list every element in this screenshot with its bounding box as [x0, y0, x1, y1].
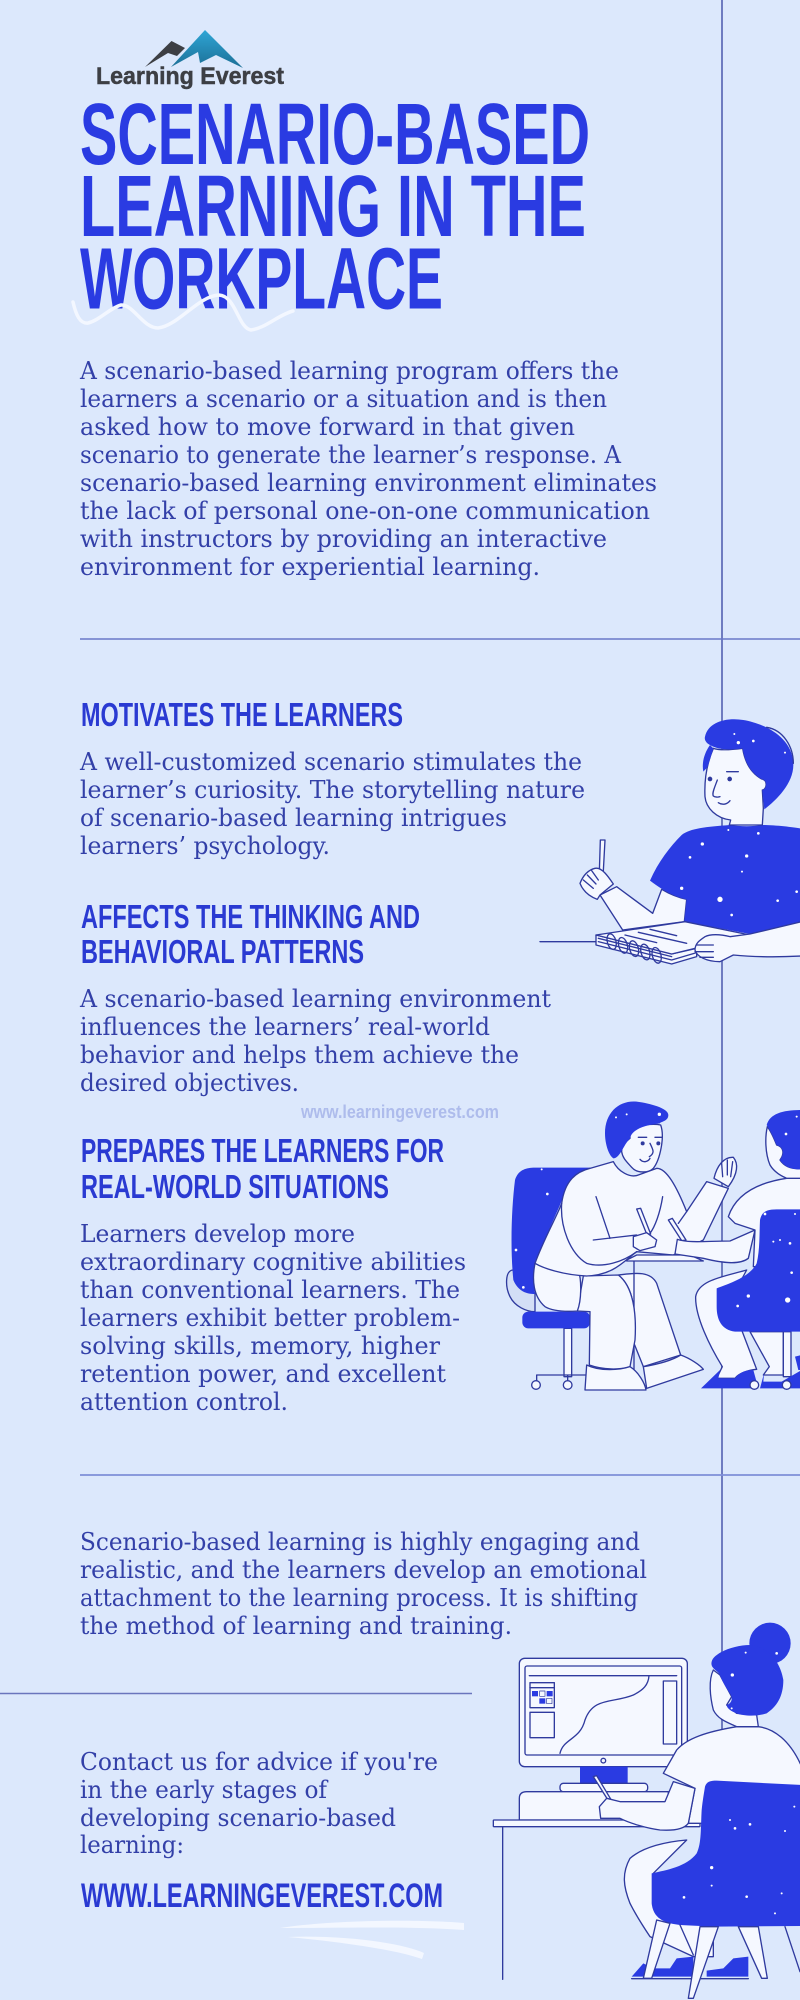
man hand and pencil — [633, 1208, 657, 1251]
raised hand — [714, 1157, 737, 1187]
intro paragraph: A scenario-based learning program offers the — [79, 357, 619, 385]
title — [80, 86, 590, 328]
second person pencil — [668, 1218, 686, 1241]
illustration: man with notebook — [540, 719, 800, 964]
table leg — [632, 1262, 636, 1390]
contact call to action: learning: — [80, 1831, 184, 1859]
table top — [627, 1255, 703, 1261]
table line — [540, 940, 597, 944]
intro paragraph: with instructors by providing an interactive — [80, 525, 607, 553]
body text: of scenario-based learning intrigues — [80, 804, 507, 832]
heading: REAL-WORLD SITUATIONS — [81, 1168, 389, 1205]
closing paragraph — [80, 1528, 647, 1640]
monitor stand — [560, 1767, 648, 1792]
notebook — [596, 922, 750, 964]
closing paragraph: realistic, and the learners develop an emotional — [80, 1556, 647, 1584]
section: prepares the learners — [80, 1132, 466, 1416]
monitor — [519, 1658, 687, 1767]
body text: learner’s curiosity. The storytelling nature — [80, 776, 585, 804]
website url: WWW.LEARNINGEVEREST.COM — [81, 1877, 443, 1915]
illustration: two people talking at a table — [507, 1102, 800, 1390]
second person arm — [675, 1230, 755, 1263]
body text: behavior and helps them achieve the — [80, 1041, 519, 1069]
second person head — [766, 1110, 800, 1178]
white squiggle under title — [73, 295, 293, 330]
hair — [703, 719, 793, 809]
section: affects the thinking and behavioral patterns — [79, 898, 551, 1097]
intro paragraph: environment for experiential learning. — [80, 553, 540, 581]
body text — [80, 1220, 466, 1416]
body text — [79, 748, 585, 860]
desk leg — [501, 1827, 505, 1979]
hand and pencil — [580, 840, 613, 899]
body text: Learners develop more — [80, 1220, 355, 1248]
chair — [652, 1781, 800, 1927]
desk surface — [493, 1820, 700, 1827]
man front shoe — [585, 1365, 646, 1390]
chair back — [512, 1168, 592, 1294]
body text: extraordinary cognitive abilities — [80, 1248, 466, 1276]
man front leg — [577, 1275, 635, 1369]
shoes — [632, 1957, 748, 1979]
head — [710, 1623, 791, 1727]
torso — [663, 1727, 800, 1823]
body text: solving skills, memory, higher — [80, 1332, 441, 1360]
speckles — [683, 1652, 795, 1914]
logo wordmark: Learning Everest — [96, 63, 284, 90]
right hand and arm — [695, 922, 800, 962]
contact call to action: Contact us for advice if you're — [80, 1748, 438, 1776]
contact call to action: developing scenario-based — [80, 1804, 396, 1832]
shirt speckles — [680, 733, 798, 916]
arm with pencil — [600, 887, 687, 930]
heading: AFFECTS THE THINKING AND — [81, 898, 420, 935]
body text: A scenario-based learning environment — [79, 985, 551, 1013]
icon: dark mountain — [145, 41, 185, 67]
body text: desired objectives. — [80, 1069, 299, 1097]
body text: than conventional learners. The — [80, 1276, 460, 1304]
intro paragraph — [79, 357, 657, 581]
speckles — [515, 1113, 798, 1307]
contact call to action — [80, 1748, 438, 1859]
face — [705, 748, 766, 825]
man torso — [535, 1162, 728, 1276]
intro paragraph: the lack of personal one-on-one communication — [80, 497, 650, 525]
face details — [708, 772, 738, 804]
body text: learners exhibit better problem- — [80, 1304, 460, 1332]
chair legs — [643, 1920, 800, 1998]
title: WORKPLACE — [80, 230, 443, 328]
body text: retention power, and excellent — [80, 1360, 446, 1388]
desktop box — [519, 1792, 668, 1820]
shirt — [650, 825, 800, 934]
logo: Learning Everest — [96, 30, 284, 90]
body text: learners’ psychology. — [80, 832, 330, 860]
heading: BEHAVIORAL PATTERNS — [81, 933, 364, 970]
body text — [79, 985, 551, 1097]
intro paragraph: asked how to move forward in that given — [80, 413, 575, 441]
heading — [81, 898, 420, 970]
contact call to action: in the early stages of — [80, 1776, 329, 1804]
woman thigh and leg — [624, 1840, 713, 1957]
closing paragraph: attachment to the learning process. It is shifting — [80, 1584, 638, 1612]
white brush strokes under url — [280, 1921, 464, 1959]
second person torso — [728, 1178, 800, 1267]
chair post and base — [532, 1328, 588, 1389]
watermark url: www.learningeverest.com — [300, 1102, 499, 1122]
second person chair — [717, 1209, 800, 1332]
body text: influences the learners’ real-world — [80, 1013, 490, 1041]
chair seat — [522, 1312, 590, 1328]
intro paragraph: scenario to generate the learner’s response. A — [80, 441, 622, 469]
heading: MOTIVATES THE LEARNERS — [81, 696, 403, 733]
heading: PREPARES THE LEARNERS FOR — [81, 1132, 444, 1169]
heading — [81, 1132, 444, 1205]
icon: blue mountain — [171, 30, 243, 68]
shirt creases — [561, 1197, 687, 1265]
chair armrest — [507, 1270, 535, 1312]
illustration: woman at computer desk — [493, 1623, 800, 1998]
second person shoes — [701, 1355, 800, 1389]
second person legs — [696, 1270, 791, 1378]
man thigh — [533, 1263, 581, 1311]
closing paragraph: the method of learning and training. — [80, 1612, 512, 1640]
body text: attention control. — [80, 1388, 288, 1416]
man head — [605, 1102, 668, 1172]
body text: A well-customized scenario stimulates the — [79, 748, 582, 776]
intro paragraph: scenario-based learning environment eliminates — [80, 469, 657, 497]
man back leg and shoe — [618, 1273, 703, 1388]
section: motivates the learners — [79, 696, 585, 860]
intro paragraph: learners a scenario or a situation and is then — [80, 385, 607, 413]
closing paragraph: Scenario-based learning is highly engaging and — [80, 1528, 640, 1556]
arm — [599, 1782, 695, 1830]
pencil — [593, 1776, 612, 1801]
